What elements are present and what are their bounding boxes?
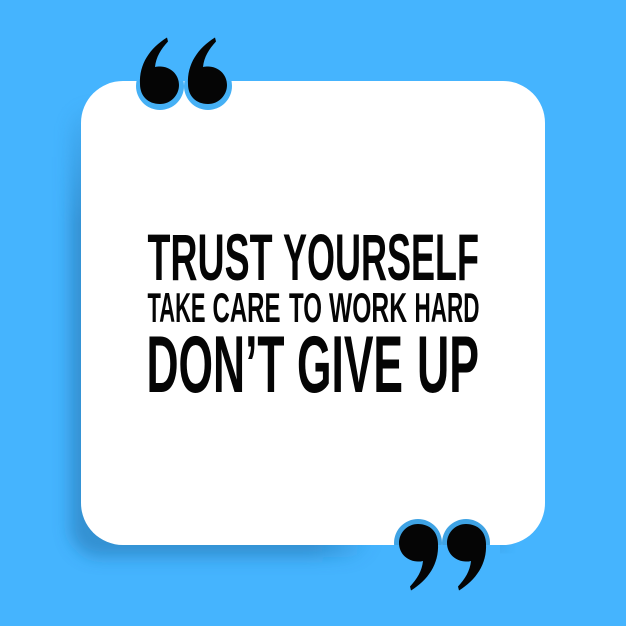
heading line: don't give up: DON’T <box>146 320 284 410</box>
text line: take care to work hard <box>148 284 480 331</box>
card shadow <box>70 100 375 557</box>
text line: take care to work hard: TAKE <box>148 284 206 331</box>
text line: take care to work hard: CARE <box>212 284 280 331</box>
heading line: trust yourself: TRUST <box>148 221 272 294</box>
text line: take care to work hard: TO <box>289 284 322 331</box>
text line: take care to work hard: HARD <box>414 284 480 331</box>
small shadow beside closing quote <box>470 535 505 549</box>
panel: white quote card <box>81 81 545 545</box>
heading line: trust yourself <box>148 221 479 294</box>
icon: opening quotation marks <box>130 30 240 110</box>
heading line: don't give up: GIVE <box>297 320 403 410</box>
text block: quote <box>146 221 480 410</box>
text line: take care to work hard: WORK <box>329 284 407 331</box>
icon: closing quotation marks <box>385 519 500 590</box>
heading line: don't give up: UP <box>417 320 479 410</box>
